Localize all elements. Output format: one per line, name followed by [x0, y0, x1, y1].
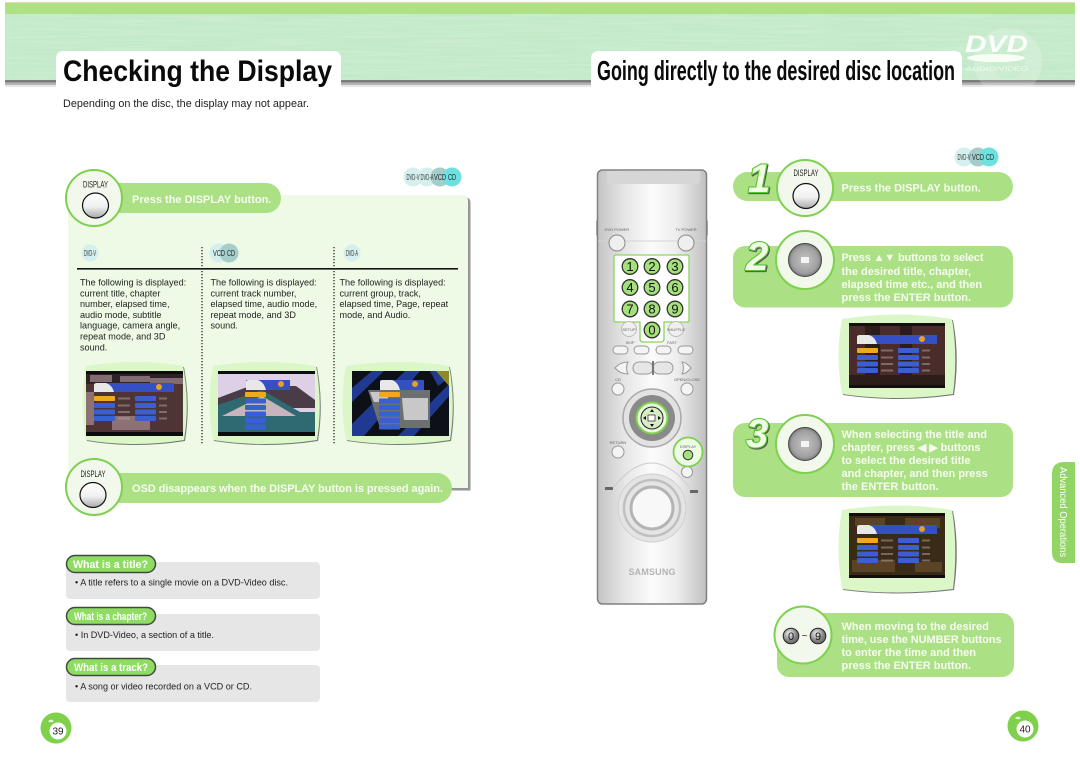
remote number keypad highlight: 8 [648, 302, 656, 316]
remote transport buttons: OPEN/CLOSE [674, 377, 700, 382]
info box: What is a track: • A song or video recorded on a VCD or CD. [75, 682, 252, 692]
remote number keypad highlight: 7 [626, 302, 634, 316]
step 3 [733, 412, 1013, 497]
step pill: Press the DISPLAY button [100, 183, 281, 213]
remote number keypad highlight [614, 255, 689, 342]
remote number keypad highlight: 1 [626, 259, 634, 274]
text: DVD-V description [80, 278, 186, 352]
info box: What is a title: • A title refers to a single movie on a DVD-Video disc. [75, 578, 288, 588]
info box: What is a track: What is a track? [74, 662, 148, 674]
disc type icons right page: DVD-V [958, 153, 971, 162]
screenshot: DVD-V on-screen display [82, 362, 188, 445]
step pill: OSD disappears [100, 473, 452, 503]
info box: What is a track [66, 658, 320, 702]
step 1: Press the DISPLAY button. [842, 182, 981, 194]
step 2: 2 [745, 235, 768, 279]
remote power buttons: DVD POWER [605, 227, 629, 232]
step 2 [733, 231, 1013, 308]
side tab: Advanced Operations [1052, 462, 1075, 563]
text: DVD-V description: number, elapsed time, [80, 299, 169, 309]
text: DVD-A description: elapsed time, Page, repeat [340, 299, 449, 309]
column 3 disc icon: DVD-A [346, 249, 358, 258]
title tab: Going directly to the desired disc location [591, 51, 962, 87]
remote number keypad highlight: 2 [648, 259, 656, 274]
page number 39: 39 [52, 726, 64, 738]
step 4 number keys: 9 [815, 631, 821, 643]
text: DVD-V description: audio mode, subtitle [80, 310, 161, 320]
text: DVD-V description: repeat mode, and 3D [80, 332, 166, 342]
page number 40: 40 [1019, 724, 1031, 736]
info box: What is a title [66, 556, 320, 599]
remote transport buttons [610, 322, 700, 478]
remote transport buttons: RETURN [610, 440, 626, 445]
icon: DISPLAY button top: DISPLAY [83, 180, 108, 190]
step 2: press the ENTER button. [842, 292, 971, 304]
remote brand: SAMSUNG [628, 567, 676, 577]
column rule and dividers [77, 247, 458, 444]
remote transport buttons: SKIP [625, 340, 635, 345]
DVD audio video logo [965, 28, 1042, 96]
text: VCD CD description: sound. [210, 321, 238, 331]
remote control [596, 170, 708, 604]
screenshot: step 3 display [838, 506, 957, 594]
remote jog dial [605, 463, 698, 542]
column 1 disc icon [82, 244, 98, 262]
remote power buttons: TV POWER [675, 227, 697, 232]
column 2 disc icon: VCD [213, 249, 225, 258]
step 4 number keys: to enter the time and then [842, 647, 976, 659]
step 3: to select the desired title [842, 455, 970, 467]
disc type icons left page: CD [448, 173, 456, 182]
step 3: chapter, press ◀ ▶ buttons [842, 442, 980, 454]
disc type icons left page: DVD-V [406, 173, 420, 182]
disc type icons right page: CD [986, 153, 994, 162]
column 3 disc icon [344, 244, 360, 262]
remote transport buttons: SHUFFLE [667, 327, 685, 332]
info box: What is a chapter [66, 608, 320, 651]
step 2: the desired title, chapter, [842, 266, 971, 278]
text: VCD CD description: current track number, [210, 288, 296, 298]
page number 40 [1008, 710, 1038, 742]
remote power buttons [605, 227, 697, 251]
step 3: the ENTER button. [842, 481, 939, 493]
DVD audio video logo: AUDIO/VIDEO [966, 67, 1029, 73]
header band [5, 2, 1075, 87]
text: DVD-A description [340, 278, 449, 320]
disc type icons left page: VCD [434, 173, 446, 182]
disc type icons right page: VCD [972, 153, 984, 162]
step 4 number keys: time, use the NUMBER buttons [842, 634, 1002, 646]
remote number keypad highlight: 0 [648, 322, 656, 338]
text: DVD-V description: language, camera angle, [80, 321, 180, 331]
subtitle note: Depending on the disc, the display may not appear. [63, 98, 309, 110]
remote number keypad highlight: 4 [626, 280, 634, 295]
remote number keypad highlight: 3 [671, 259, 679, 274]
remote transport buttons: FAST [667, 340, 678, 345]
text: VCD CD description: elapsed time, audio mode, [210, 299, 317, 309]
column 2 disc icon: CD [227, 249, 235, 258]
step 1: DISPLAY [794, 168, 818, 178]
remote transport buttons: SETUP [622, 327, 636, 332]
remote number keypad highlight: 5 [648, 280, 656, 295]
step 1: 1 [748, 157, 770, 201]
column 2 disc icon [210, 244, 238, 262]
disc type icons left page [404, 168, 462, 186]
step 4 number keys: ~ [802, 631, 808, 642]
step 2: elapsed time etc., and then [842, 279, 982, 291]
step 4 number keys: When moving to the desired [842, 621, 989, 633]
icon: DISPLAY button bottom: DISPLAY [80, 469, 106, 479]
remote number keypad highlight: 6 [671, 280, 679, 295]
info box: What is a chapter: • In DVD-Video, a section of a title. [75, 630, 214, 640]
remote DISPLAY key highlight [674, 438, 702, 466]
text: DVD-V description: The following is displayed: [80, 278, 186, 288]
text: DVD-V description: current title, chapter [80, 288, 160, 298]
remote number keypad highlight: 9 [671, 302, 679, 316]
screenshot: DVD-A on-screen display [342, 362, 454, 445]
step 1 [733, 157, 1013, 216]
info box: What is a title: What is a title? [73, 559, 148, 571]
side tab: Advanced Operations: Advanced Operations [1057, 467, 1068, 557]
text: VCD CD description [210, 278, 317, 331]
text: DVD-A description: mode, and Audio. [340, 310, 410, 320]
step 3: and chapter, and then press [842, 468, 988, 480]
text: DVD-V description: sound. [80, 342, 107, 352]
step 3: 3 [746, 412, 768, 456]
DVD audio video logo: DVD [965, 31, 1028, 58]
disc type icons left page: DVD-A [420, 173, 434, 182]
text: VCD CD description: The following is displayed: [210, 278, 317, 288]
remote navigation wheel [623, 389, 681, 447]
text: DVD-A description: current group, track, [340, 288, 421, 298]
disc type icons right page [954, 148, 998, 166]
step 4 number keys [774, 606, 1014, 677]
screenshot: step 2 display [838, 314, 957, 399]
icon: DISPLAY button top [66, 170, 122, 226]
text: VCD CD description: repeat mode, and 3D [210, 310, 296, 320]
column 1 disc icon: DVD-V [84, 249, 96, 258]
panel: display information [68, 195, 470, 490]
info box: What is a chapter: What is a chapter? [74, 611, 147, 623]
step 4 number keys: press the ENTER button. [842, 660, 971, 672]
step pill: OSD disappears: OSD disappears when the DISPLAY button is pressed again. [132, 483, 443, 495]
step 3: When selecting the title and [842, 429, 987, 441]
page number 39 [40, 712, 72, 744]
step 2: Press ▲▼ buttons to select [842, 252, 984, 264]
title tab: Checking the Display: Checking the Display [63, 55, 332, 88]
screenshot: VCD on-screen display [210, 362, 321, 445]
step pill: Press the DISPLAY button: Press the DISPLAY button. [132, 194, 271, 206]
remote DISPLAY key highlight: DISPLAY [680, 444, 697, 449]
remote transport buttons: CD [615, 377, 621, 382]
step 4 number keys: 0 [788, 631, 794, 643]
icon: DISPLAY button bottom [66, 459, 122, 515]
text: DVD-A description: The following is displayed: [340, 278, 446, 288]
